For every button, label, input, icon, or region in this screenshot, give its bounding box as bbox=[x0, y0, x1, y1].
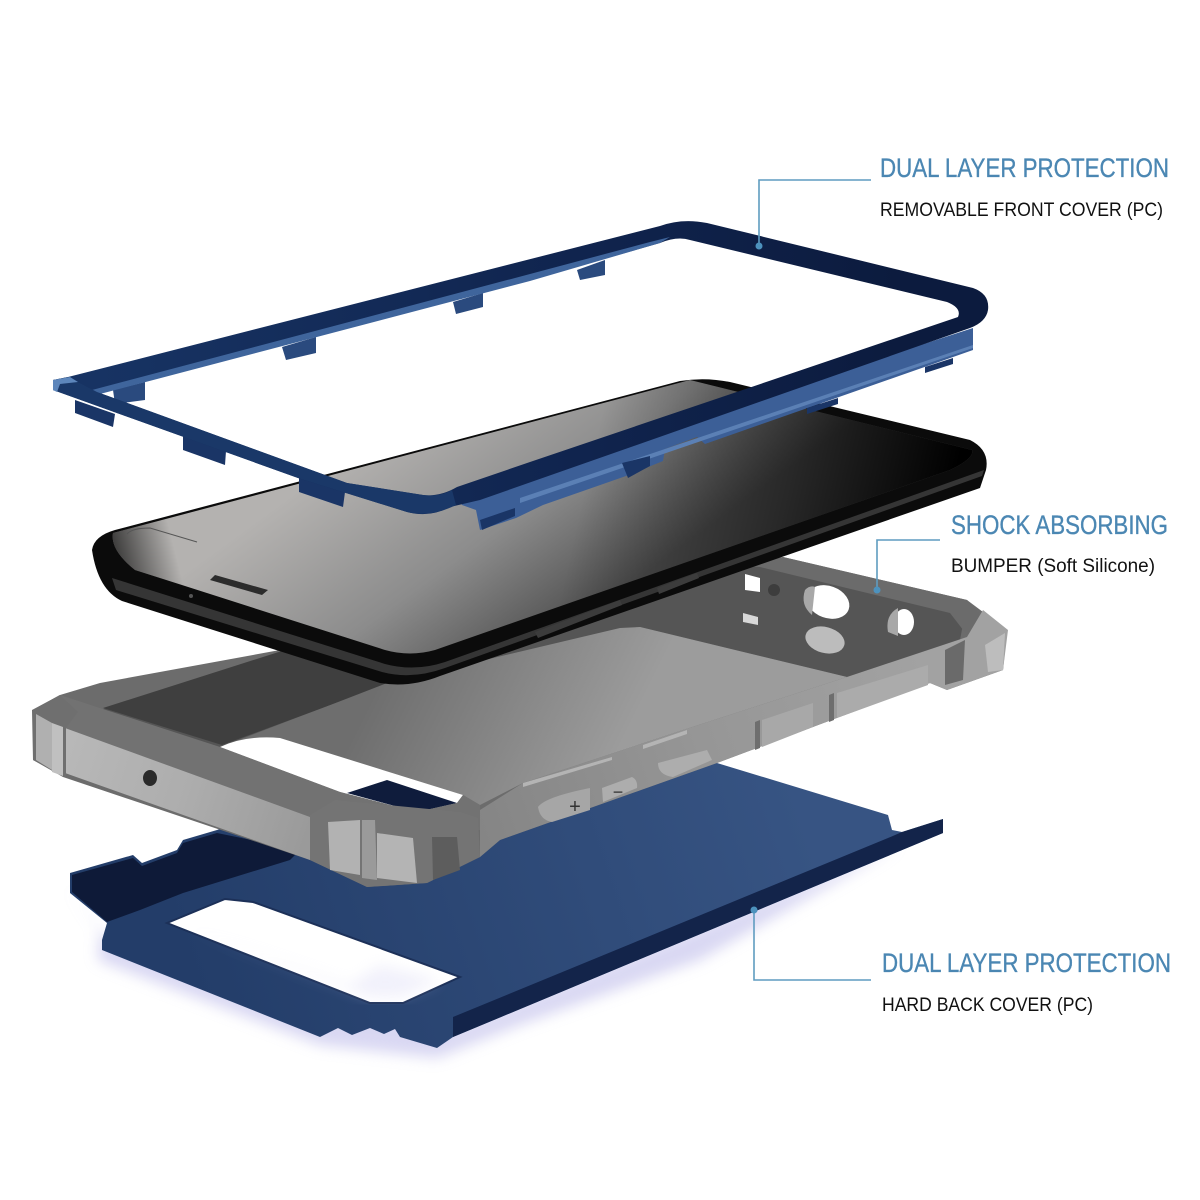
bumper recess dark bbox=[100, 560, 967, 747]
back cover inner recess bbox=[72, 833, 300, 922]
frame lower tabs bbox=[75, 400, 345, 507]
power key bbox=[657, 573, 699, 594]
cutout shadow bbox=[180, 925, 440, 997]
back cover plate bbox=[70, 763, 943, 1048]
back cover shadow bbox=[66, 845, 900, 1058]
volume key bbox=[535, 600, 622, 638]
frame left rail bbox=[53, 377, 456, 514]
text: back cover material: HARD BACK COVER (PC) bbox=[882, 995, 1093, 1016]
text: front cover material: REMOVABLE FRONT COVER (PC) bbox=[880, 200, 1163, 221]
leader line: bumper bbox=[877, 540, 940, 592]
bumper body outline bbox=[32, 557, 1007, 887]
side wall panels bbox=[523, 665, 928, 787]
back cover camera cutout bbox=[167, 899, 460, 1003]
frame top tabs bbox=[113, 260, 605, 404]
callout: back cover bbox=[750, 906, 1171, 1016]
phone body bbox=[92, 379, 987, 684]
volume button plus bbox=[538, 788, 590, 822]
volume button plus: + bbox=[569, 796, 581, 818]
leader line: back cover bbox=[754, 910, 871, 980]
back cover seen through opening bbox=[347, 780, 457, 812]
callout: bumper bbox=[874, 510, 1168, 594]
leader dot: back cover bbox=[750, 906, 758, 914]
text: bumper material: BUMPER (Soft Silicone) bbox=[951, 556, 1155, 577]
frame left tip highlight bbox=[53, 377, 78, 392]
volume button minus: − bbox=[613, 782, 623, 802]
frame small tabs bbox=[480, 358, 953, 530]
microphone bbox=[189, 594, 193, 598]
frame top surface bbox=[53, 221, 988, 514]
sensor outline on screen bbox=[127, 528, 197, 542]
leader dot: front cover bbox=[756, 242, 762, 250]
phone bbox=[92, 379, 987, 684]
camera holes bbox=[743, 574, 914, 658]
screen right falloff bbox=[113, 380, 972, 654]
bumper front rail bbox=[65, 728, 310, 860]
volume button minus bbox=[602, 777, 637, 802]
bumper floor bbox=[222, 627, 847, 805]
leader dot: bumper bbox=[874, 586, 880, 594]
front cover frame bbox=[53, 221, 988, 530]
back cover edge bbox=[453, 819, 943, 1037]
bumper side wall bbox=[480, 637, 967, 857]
bumper rim bbox=[740, 557, 985, 635]
callout: front cover bbox=[756, 153, 1169, 250]
bumper front chamfer bbox=[33, 695, 480, 830]
left corner guard bbox=[33, 695, 78, 777]
bumper left recess darker bbox=[103, 650, 390, 745]
leader line: front cover bbox=[759, 180, 871, 245]
screen left falloff bbox=[113, 380, 972, 654]
power button bbox=[658, 750, 712, 777]
frame side highlight bbox=[520, 345, 973, 503]
right corner guard bbox=[937, 610, 1008, 690]
headphone jack bbox=[143, 770, 157, 786]
speaker bbox=[210, 575, 268, 595]
phone screen bbox=[113, 380, 972, 654]
phone side highlight bbox=[112, 470, 984, 675]
frame top rail highlight bbox=[92, 237, 670, 394]
front corner guard bbox=[310, 800, 480, 887]
back cover bbox=[66, 763, 943, 1058]
frame lit side bbox=[458, 328, 973, 530]
camera opening in bumper floor bbox=[220, 737, 463, 812]
bumper bbox=[32, 557, 1008, 887]
